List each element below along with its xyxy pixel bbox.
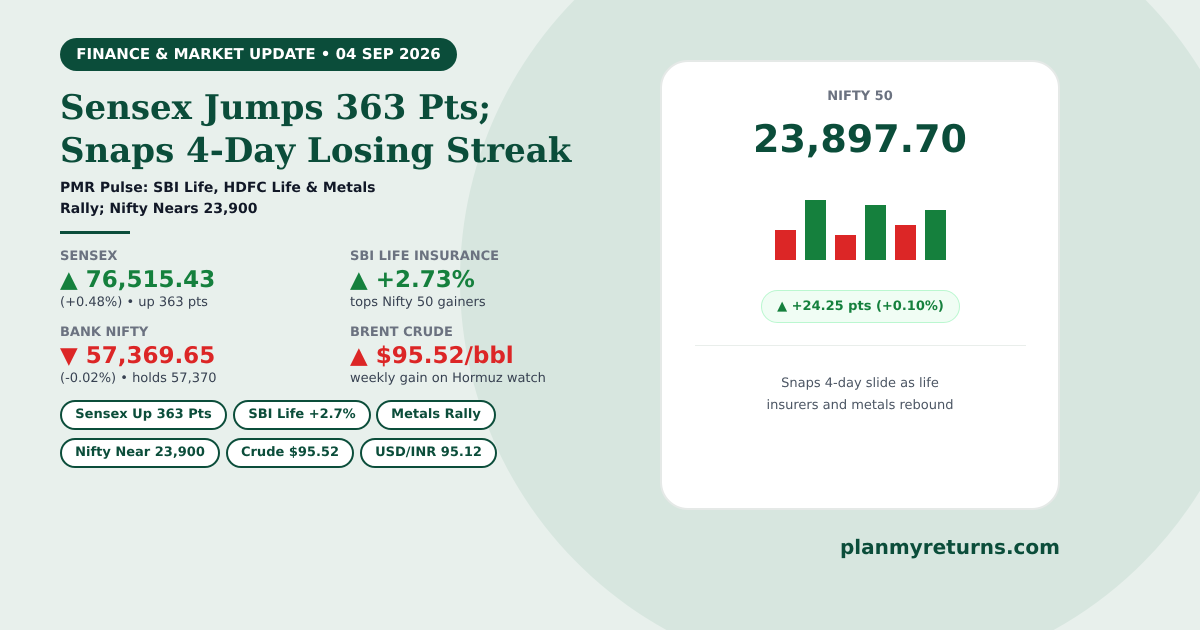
- chip: Nifty Near 23,900: [60, 438, 220, 468]
- card note: [766, 376, 954, 413]
- bar chart: [775, 200, 946, 260]
- stat: Sensex: SENSEX: [60, 249, 117, 264]
- chip: Sensex Up 363 Pts: Sensex Up 363 Pts: [75, 407, 212, 422]
- chip: SBI Life +2.7%: [233, 400, 371, 430]
- subtitle: Rally; Nifty Nears 23,900: [60, 201, 258, 217]
- stat: Bank Nifty: (-0.02%) • holds 57,370: [60, 371, 217, 386]
- stat: SBI Life Insurance: tops Nifty 50 gainers: [350, 295, 486, 310]
- change pill: [761, 290, 960, 323]
- chip: Nifty Near 23,900: Nifty Near 23,900: [75, 445, 205, 460]
- category pill: FINANCE & MARKET UPDATE • 04 SEP 2026: [76, 45, 441, 63]
- stat: Bank Nifty: BANK NIFTY: [60, 325, 148, 340]
- chip: USD/INR 95.12: USD/INR 95.12: [375, 445, 482, 460]
- stat: Brent Crude: ▲ $95.52/bbl: [350, 343, 514, 369]
- stat: Bank Nifty: [60, 325, 217, 386]
- subtitle: PMR Pulse: SBI Life, HDFC Life & Metals: [60, 180, 376, 196]
- chip: Crude $95.52: Crude $95.52: [241, 445, 339, 460]
- title: Sensex Jumps 363 Pts;: [60, 88, 491, 128]
- stat: Brent Crude: [350, 325, 546, 386]
- panel: Nifty 50 card: [660, 60, 1060, 510]
- title: [60, 88, 572, 171]
- chip: Metals Rally: Metals Rally: [391, 407, 481, 422]
- title: Snaps 4-Day Losing Streak: [60, 131, 571, 171]
- card note: insurers and metals rebound: [766, 398, 954, 413]
- divider: [695, 345, 1026, 346]
- chip: Metals Rally: [376, 400, 496, 430]
- chip: Sensex Up 363 Pts: [60, 400, 227, 430]
- stat: SBI Life Insurance: SBI LIFE INSURANCE: [350, 249, 499, 264]
- chip: Crude $95.52: [226, 438, 354, 468]
- stat: Sensex: (+0.48%) • up 363 pts: [60, 295, 208, 310]
- subtitle: [60, 180, 376, 217]
- stat: Brent Crude: BRENT CRUDE: [350, 325, 453, 340]
- stat: SBI Life Insurance: ▲ +2.73%: [350, 267, 475, 293]
- stat: Sensex: [60, 249, 215, 310]
- card note: Snaps 4-day slide as life: [781, 376, 939, 391]
- category pill: [60, 38, 457, 71]
- accent rule: [60, 231, 130, 234]
- stat: Sensex: ▲ 76,515.43: [60, 267, 215, 293]
- change pill: ▲ +24.25 pts (+0.10%): [777, 299, 944, 314]
- stat: Brent Crude: weekly gain on Hormuz watch: [350, 371, 546, 386]
- chip: SBI Life +2.7%: SBI Life +2.7%: [248, 407, 356, 422]
- brand: planmyreturns.com: [840, 535, 1060, 559]
- stat: SBI Life Insurance: [350, 249, 499, 310]
- stat: Bank Nifty: ▼ 57,369.65: [60, 343, 215, 369]
- card label: NIFTY 50: [827, 88, 893, 104]
- chip: USD/INR 95.12: [360, 438, 497, 468]
- card value: 23,897.70: [753, 117, 967, 161]
